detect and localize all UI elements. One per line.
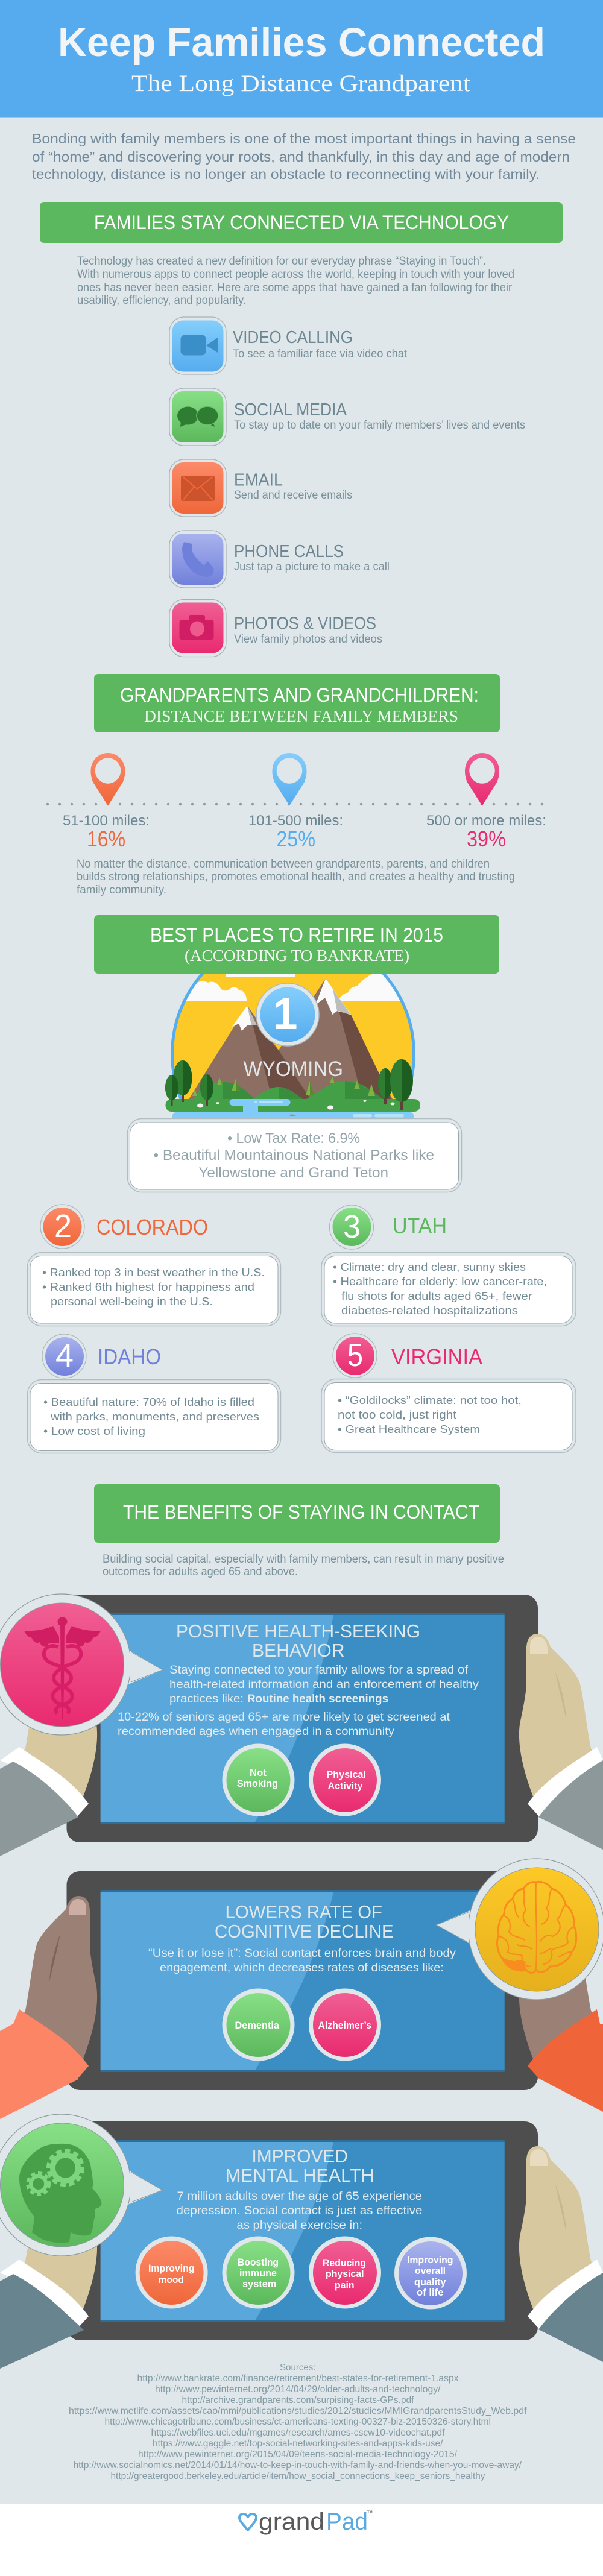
panel: positive health-seeking behavior tablet [0,1594,603,1856]
app row: photos and videos: PHOTOS & VIDEOS [234,614,376,633]
badge: improving mood [136,2237,208,2309]
heading: grandparents and grandchildren: DISTANCE BETWEEN FAMILY MEMBERS [144,707,458,725]
icon: head with gears [19,2144,101,2243]
icon: blue map pin [273,753,306,805]
card: colorado facts: • Ranked top 3 in best weather in the U.S. [42,1266,265,1279]
logo wordmark: Pad [326,2508,368,2535]
badge: boosting immune system [222,2237,294,2309]
icon: brain [497,1882,576,1973]
benefits paragraph: Building social capital, especially with family members, can result in many positive [103,1553,504,1566]
badge: reducing physical pain [309,2237,381,2309]
sources list: https://webfiles.uci.edu/mgames/research/ames-cscw10-videochat.pdf [151,2428,445,2438]
round trees [165,1059,413,1110]
technology paragraph: usability, efficiency, and popularity. [77,294,246,307]
icon: camera [169,599,226,657]
text block: health body copy: Staying connected to your family allows for a spread of [169,1664,469,1677]
badge: not smoking: Not [250,1768,267,1778]
heading: the benefits of staying in contact [94,1484,500,1543]
dotted distance line [48,803,543,805]
heading: families stay connected via technology [40,202,563,243]
badge: not smoking: Smoking [237,1778,278,1789]
badge: dementia: Dementia [235,2020,280,2031]
card: utah facts: • Healthcare for elderly: low cancer-rate, [333,1275,547,1288]
rank 4 heading: idaho: 4 [55,1338,74,1374]
icon: orange map pin [90,753,125,805]
heading: improved mental health: MENTAL HEALTH [226,2165,374,2186]
app row: email: EMAIL [234,470,283,490]
text block: health body copy: health-related information and an enforcement of healthy [169,1678,479,1691]
heading: lowers rate of cognitive decline: COGNITIVE DECLINE [215,1921,393,1942]
badge: physical activity: Physical [327,1769,366,1780]
badge: boosting immune system: system [242,2279,276,2290]
rank 5 heading: virginia: 5 [347,1337,363,1373]
left hand [0,2146,97,2369]
sources list [69,2363,527,2481]
app row: photos and videos: View family photos and videos [234,633,382,646]
app row: photos and videos [169,599,382,657]
rank 3 heading: utah [329,1205,447,1249]
subtitle: The Long Distance Grandparent [131,71,470,96]
stat: 101-500 miles [248,813,343,851]
sources list: Sources: [280,2363,316,2373]
heading: positive health-seeking behavior [176,1620,420,1661]
text block: health body copy: 10-22% of seniors aged 65+ are more likely to get screened at [118,1711,450,1724]
stat: 51-100 miles: 16% [87,827,125,851]
card: utah facts: diabetes-related hospitalizations [341,1304,518,1317]
heading: best places to retire: BEST PLACES TO RETIRE IN 2015 [150,924,443,946]
callout bubble with head [0,2114,163,2256]
badge: alzheimer's: Alzheimer’s [318,2020,371,2031]
card: utah facts: flu shots for adults aged 65+, fewer [341,1290,532,1302]
icon: envelope [169,459,226,517]
icon: phone handset [169,531,226,588]
icon: caduceus [24,1617,101,1719]
card: wyoming facts: Yellowstone and Grand Teton [199,1165,388,1181]
sources list: https://www.gaggle.net/top-social-networking-sites-and-apps-kids-use/ [153,2439,443,2449]
technology paragraph [77,255,514,307]
text block: mental health body copy: 7 million adults over the age of 65 experience [177,2190,422,2203]
badge: reducing physical pain: pain [335,2280,355,2291]
rank 3 heading: utah: 3 [343,1209,361,1245]
rank 1 medallion: 1 [273,989,298,1039]
intro paragraph: Bonding with family members is one of the most important things in having a sense [32,131,576,146]
card: virginia facts: • “Goldilocks” climate: not too hot, [338,1394,522,1406]
badge: improving mood: Improving [148,2263,194,2274]
heading: positive health-seeking behavior: BEHAVIOR [252,1640,345,1661]
heading: best places to retire [94,915,499,974]
sources list: http://greatergood.berkeley.edu/article/item/how_social_connections_keep_seniors_healthy [111,2471,485,2481]
stat: 500 or more miles [426,813,546,851]
rank 3 heading: utah: UTAH [393,1214,447,1238]
heading: lowers rate of cognitive decline: LOWERS RATE OF [226,1901,382,1923]
icon: heart [239,2514,256,2530]
stat: 101-500 miles: 101-500 miles: [248,813,343,829]
text block: health body copy: Routine health screenings [247,1693,388,1705]
title: Keep Families Connected [58,20,545,65]
callout bubble with brain [437,1859,603,2000]
card: colorado facts [28,1253,281,1326]
heading: grandparents and grandchildren: GRANDPARENTS AND GRANDCHILDREN: [120,684,479,706]
rank 5 heading: virginia [333,1334,482,1378]
app row: social media [169,388,525,446]
card: wyoming facts [128,1119,462,1192]
illustration: wyoming mountain scene [165,974,420,1118]
icon: small gear [28,2173,49,2194]
card: idaho facts: • Low cost of living [43,1425,145,1437]
header banner [0,0,603,118]
sources list: http://www.pewinternet.org/2014/04/29/older-adults-and-technology/ [155,2384,441,2395]
logo wordmark: TM [367,2511,373,2515]
text block: cognitive body copy [148,1947,456,1974]
left hand [0,1634,97,1856]
sources list: http://www.socialnomics.net/2014/01/14/how-to-keep-in-touch-with-family-and-friends-when-you-move-away/ [74,2460,522,2471]
rank 5 heading: virginia: VIRGINIA [391,1344,482,1369]
logo wordmark [259,2508,373,2535]
distance paragraph: No matter the distance, communication between grandparents, parents, and children [77,858,490,871]
icon: pink map pin [465,753,499,805]
app row: phone calls: PHONE CALLS [234,542,344,561]
stat: 51-100 miles: 51-100 miles: [63,813,150,829]
heading: families stay connected via technology: FAMILIES STAY CONNECTED VIA TECHNOLOGY [94,212,509,233]
icon: large gear [48,2151,82,2185]
app row: video calling: To see a familiar face via video chat [233,348,408,361]
right hand [519,1896,603,2112]
badge: improving overall quality of life [394,2237,467,2309]
card: colorado facts: • Ranked 6th highest for happiness and [42,1280,254,1293]
technology paragraph: With numerous apps to connect people across the world, keeping in touch with your loved [77,268,514,281]
badge: reducing physical pain: physical [326,2269,364,2279]
sources list: http://www.pewinternet.org/2015/04/09/teens-social-media-technology-2015/ [138,2449,458,2460]
text block: mental health body copy: depression. Social contact is just as effective [176,2205,422,2217]
badge: physical activity: Activity [328,1781,363,1792]
card: utah facts: • Climate: dry and clear, sunny skies [333,1261,526,1273]
app row: video calling: VIDEO CALLING [233,328,353,347]
technology paragraph: Technology has created a new definition for our everyday phrase “Staying in Touch”. [77,255,486,268]
badge: boosting immune system: immune [239,2268,277,2279]
text block: cognitive body copy: engagement, which decreases rates of diseases like: [160,1962,444,1974]
app row: social media: To stay up to date on your family members’ lives and events [234,419,525,432]
intro paragraph: technology, distance is no longer an obstacle to reconnecting with your family. [32,166,540,182]
hills [192,1081,385,1100]
sources list: http://www.chicagotribune.com/business/ct-americans-texting-00327-biz-20150326-story.html [105,2417,491,2427]
distance paragraph: family community. [77,884,166,896]
badge: alzheimer's [309,1988,381,2061]
rank 2 heading: colorado: 2 [54,1208,72,1244]
app row: social media: SOCIAL MEDIA [234,400,347,420]
card: idaho facts [28,1379,281,1453]
badge: improving overall quality of life: of life [417,2287,444,2298]
badge: reducing physical pain: Reducing [323,2258,366,2269]
card: wyoming facts: • Low Tax Rate: 6.9% [227,1130,360,1147]
state name: wyoming: WYOMING [244,1057,343,1081]
app row: phone calls [169,531,390,588]
card: virginia facts: not too cold, just right [338,1408,456,1421]
app row: phone calls: Just tap a picture to make a call [234,561,390,573]
footer with grandPad logo [0,2504,603,2576]
rank 4 heading: idaho [42,1334,161,1378]
text block: health body copy: recommended ages when engaged in a community [118,1725,395,1738]
card: utah facts [321,1253,576,1326]
distance paragraph [77,858,515,896]
technology paragraph: ones has never been easier. Here are some apps that have gained a fan following for their [77,282,513,294]
heading: grandparents and grandchildren [94,674,500,732]
app row: email: Send and receive emails [234,489,352,502]
panel: lowers rate of cognitive decline tablet [0,1859,603,2119]
rank 4 heading: idaho: IDAHO [98,1344,161,1369]
text block: mental health body copy: as physical exercise in: [236,2219,362,2232]
badge: improving overall quality of life: quality [414,2277,446,2288]
stat: 500 or more miles: 39% [467,827,506,851]
heading: positive health-seeking behavior: POSITIVE HEALTH-SEEKING [176,1620,420,1642]
badge: improving overall quality of life: Improving [407,2255,453,2266]
card: idaho facts: with parks, monuments, and preserves [50,1410,259,1423]
badge: improving overall quality of life: overall [415,2266,446,2276]
stat: 51-100 miles [63,813,150,851]
text block: mental health body copy [176,2190,422,2232]
rocks [197,1100,394,1109]
badge: improving mood: mood [158,2275,184,2285]
sources list: http://archive.grandparents.com/surpising-facts-GPs.pdf [182,2395,414,2405]
heading: the benefits of staying in contact: THE BENEFITS OF STAYING IN CONTACT [123,1501,479,1523]
app row: email [169,459,352,517]
benefits paragraph [103,1553,504,1578]
card: virginia facts: • Great Healthcare System [338,1423,480,1435]
icon: speech bubbles [169,388,226,446]
sources list: http://www.bankrate.com/finance/retirement/best-states-for-retirement-1.aspx [137,2373,459,2384]
stat: 500 or more miles: 500 or more miles: [426,813,546,829]
benefits paragraph: outcomes for adults aged 65 and above. [103,1566,298,1578]
heading: lowers rate of cognitive decline [215,1901,393,1942]
badge: boosting immune system: Boosting [238,2257,279,2268]
rank 2 heading: colorado: COLORADO [96,1215,208,1239]
distance paragraph: builds strong relationships, promotes emotional health, and creates a healthy and trusting [77,871,515,883]
intro paragraph [32,131,576,182]
badge: not smoking [222,1743,294,1816]
pine trees [192,1076,375,1096]
app row: video calling [169,317,408,374]
text block: cognitive body copy: “Use it or lose it”: Social contact enforces brain and body [148,1947,456,1960]
rank 2 heading: colorado [40,1205,208,1249]
callout bubble with caduceus [0,1594,163,1735]
heading: improved mental health [226,2146,374,2186]
card: wyoming facts: • Beautiful Mountainous National Parks like [153,1147,434,1164]
card: idaho facts: • Beautiful nature: 70% of Idaho is filled [43,1396,254,1408]
badge: dementia [222,1988,294,2061]
text block: health body copy: practices like: [169,1693,244,1705]
right hand [519,2146,603,2362]
logo wordmark: grand [259,2508,324,2535]
text block: health body copy [118,1664,479,1738]
sources list: https://www.metlife.com/assets/cao/mmi/publications/studies/2012/studies/MMIGrandparentsStudy_Web.pdf [69,2406,527,2416]
card: virginia facts [321,1379,576,1453]
right hand [519,1634,603,1850]
card: colorado facts: personal well-being in the U.S. [51,1295,213,1308]
rank 1 medallion [256,983,319,1046]
panel: improved mental health tablet [0,2114,603,2369]
intro paragraph: of “home” and discovering your roots, and thankfully, in this day and age of modern [32,149,570,165]
left hand [0,1896,97,2119]
stat: 101-500 miles: 25% [276,827,315,851]
heading: best places to retire: (ACCORDING TO BANKRATE) [185,946,409,965]
badge: physical activity [309,1743,381,1816]
heading: improved mental health: IMPROVED [252,2146,348,2167]
icon: video camera [169,317,226,374]
